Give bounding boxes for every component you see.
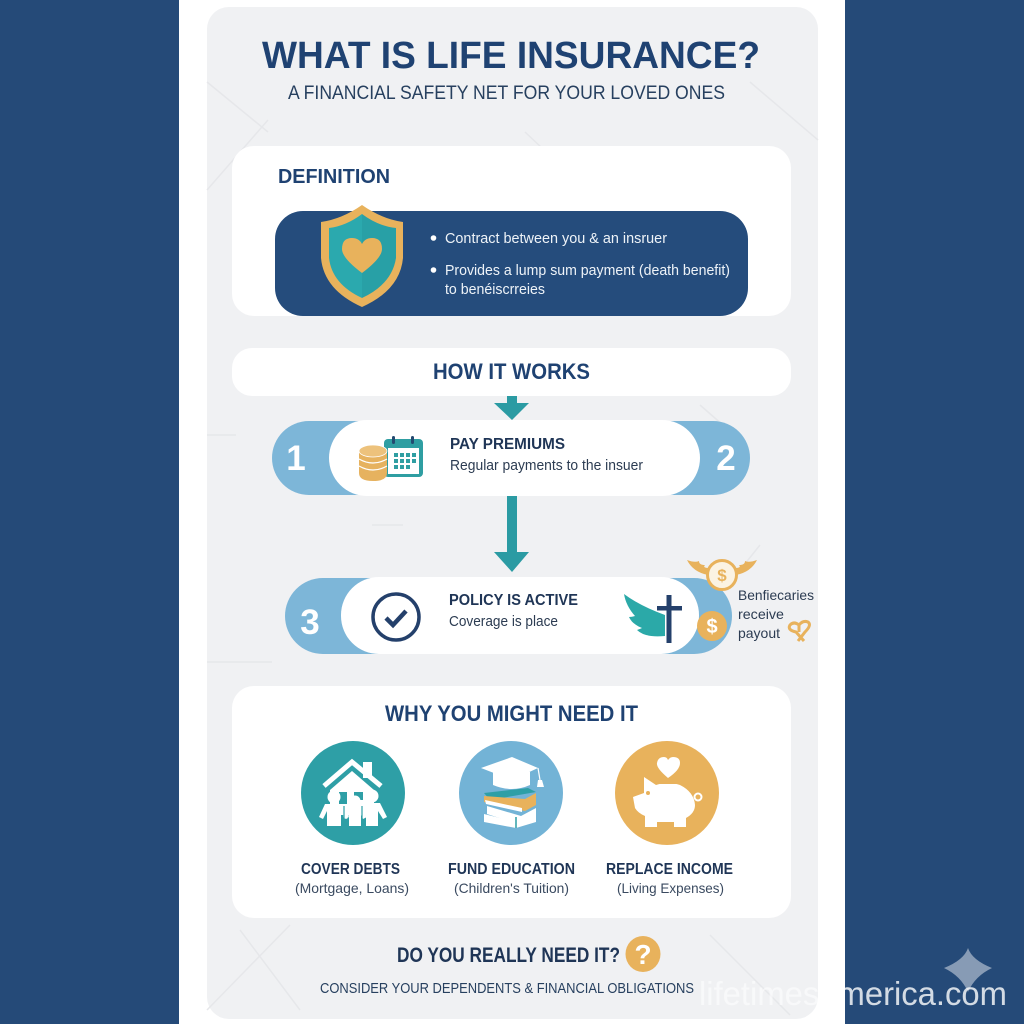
panel: definition — [232, 146, 791, 316]
watermark text: lifetimesamerica.com — [699, 975, 1007, 1012]
step text: POLICY IS ACTIVE — [449, 592, 578, 609]
heading: definition: DEFINITION — [278, 166, 390, 188]
label: replace income: (Living Expenses) — [617, 880, 724, 896]
label: fund education: (Children's Tuition) — [454, 880, 569, 896]
step: pay premiums: Regular payments to the insuer — [450, 458, 643, 474]
watermark star — [944, 948, 992, 992]
number 2: 2 — [716, 439, 736, 478]
icon: winged coin — [687, 560, 757, 590]
icon: question mark — [626, 936, 660, 972]
label: replace income: REPLACE INCOME — [606, 861, 733, 878]
arrow: step to policy — [494, 496, 529, 572]
icon: dollar coin — [697, 611, 727, 641]
step: pay premiums — [272, 420, 750, 496]
heading: why: WHY YOU MIGHT NEED IT — [385, 701, 639, 726]
label: replace income — [606, 861, 733, 896]
icon: check circle — [373, 594, 419, 640]
closing note: CONSIDER YOUR DEPENDENTS & FINANCIAL OBLIGATIONS — [320, 980, 694, 997]
closing question: DO YOU REALLY NEED IT? — [397, 944, 620, 967]
panel: how it works heading: HOW IT WORKS — [433, 359, 590, 384]
step: policy is active: Coverage is place — [449, 614, 558, 630]
definition banner — [275, 211, 748, 316]
number 1: 1 — [286, 439, 306, 478]
step text: PAY PREMIUMS — [450, 436, 565, 453]
icon: house and family — [301, 741, 405, 845]
panel: how it works heading — [232, 348, 791, 396]
label: cover debts: (Mortgage, Loans) — [295, 880, 409, 896]
step: policy is active — [285, 577, 732, 654]
definition bullets: Provides a lump sum payment (death benefit) — [445, 263, 730, 279]
icon: coins and calendar — [359, 436, 423, 481]
payout text: payout — [738, 625, 780, 641]
definition bullets: to benéiscrreies — [445, 282, 545, 298]
label: fund education — [448, 861, 575, 896]
icon: wing and cross — [624, 594, 682, 643]
payout text: receive — [738, 606, 784, 622]
icon: piggy bank with heart — [615, 741, 719, 845]
number 3: 3 — [300, 603, 320, 642]
background panel — [207, 7, 818, 1019]
label: cover debts — [295, 861, 409, 896]
icon: ribbon heart — [789, 621, 809, 641]
icon: graduation cap and books — [459, 741, 563, 845]
icon: winged coin: $ — [717, 566, 727, 585]
icon: question mark: ? — [634, 939, 652, 970]
payout text: Benfiecaries — [738, 587, 814, 603]
label: fund education: FUND EDUCATION — [448, 861, 575, 878]
panel: why you might need it — [232, 686, 791, 918]
subtitle: A FINANCIAL SAFETY NET FOR YOUR LOVED ONES — [288, 83, 725, 104]
arrow: heading to step — [494, 396, 529, 420]
payout text — [738, 587, 814, 641]
label: cover debts: COVER DEBTS — [301, 861, 400, 878]
definition bullets: Contract between you & an insruer — [445, 231, 667, 247]
title: WHAT IS LIFE INSURANCE? — [262, 35, 760, 77]
icon: dollar coin: $ — [706, 616, 718, 638]
icon: shield with heart — [321, 205, 403, 307]
definition bullets — [431, 231, 730, 298]
